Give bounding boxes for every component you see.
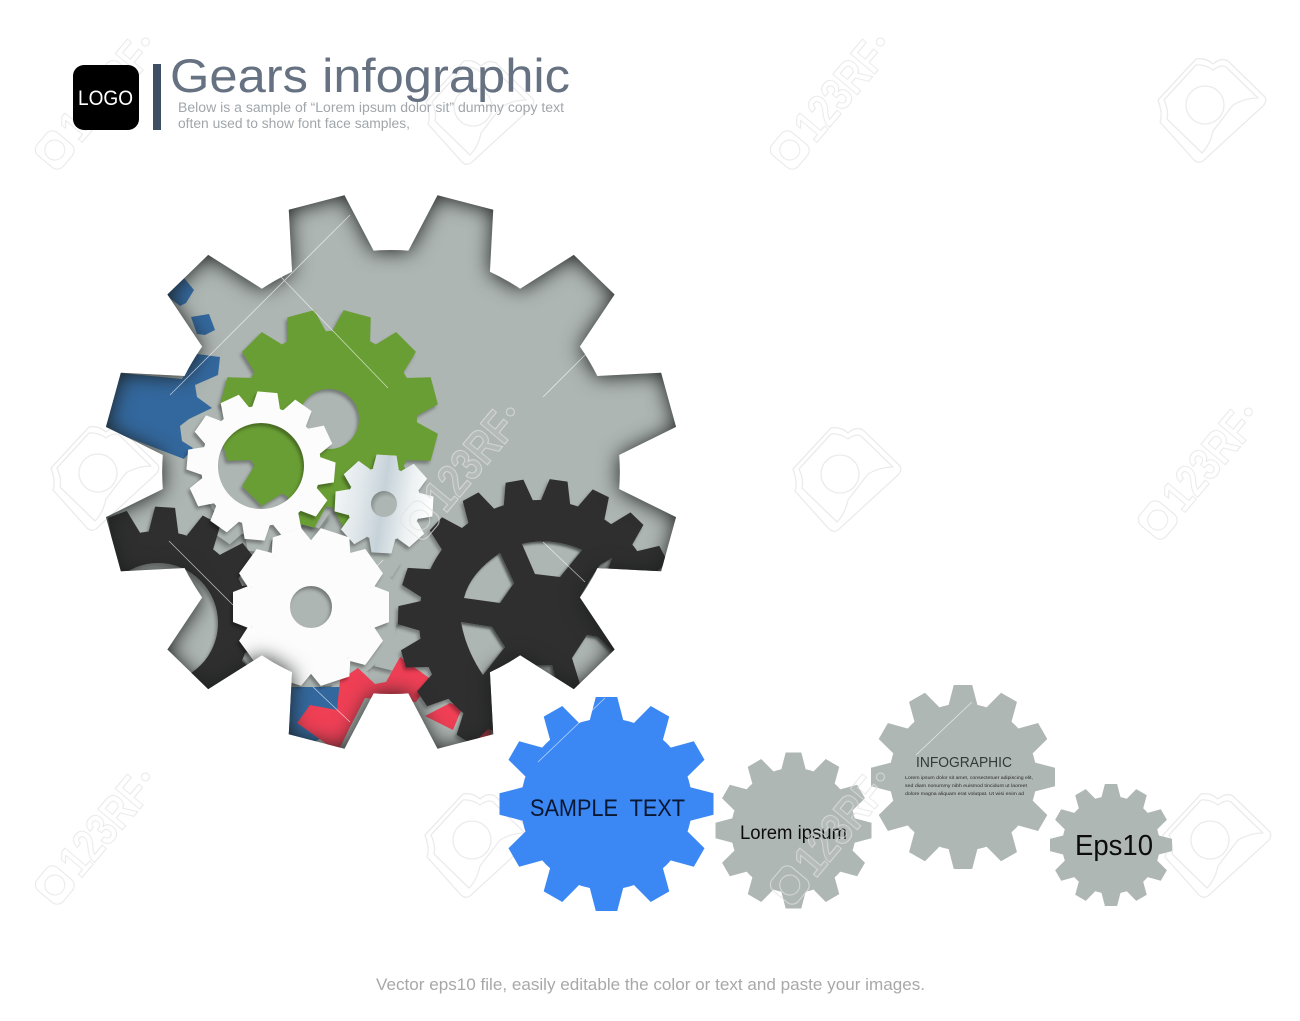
gray gear: lorem ipsum: Lorem ipsum: [740, 823, 847, 844]
gray gear: infographic: dolore magna aliquam erat volutpat. Ut wisi enim ad: [905, 791, 1024, 797]
title: Gears infographic: [170, 49, 570, 102]
inner edge shadow of the cut-out: [102, 192, 680, 752]
gray shadow gear below white ring: [200, 474, 332, 555]
gray gear: infographic: [871, 685, 1055, 869]
gray gear: infographic: Lorem ipsum dolor sit amet, consectetuer adipiscing elit,: [905, 775, 1033, 781]
white highlight sliver: [256, 655, 280, 666]
dark gear, left: [107, 506, 252, 690]
white lower gear: [233, 526, 389, 688]
blue gear: sample text: [500, 697, 714, 911]
silver small gear: [330, 450, 438, 558]
red gear fragments: [297, 657, 492, 752]
gray gear: Eps10: Eps10: [1075, 830, 1153, 862]
blue gear fragments: [98, 278, 345, 750]
title divider bar: [153, 64, 161, 130]
gray gear: infographic: INFOGRAPHIC: [916, 754, 1012, 771]
gray gear: infographic: sed diam nonummy nibh euismod tincidunt ut laoreet: [905, 783, 1028, 789]
dark gear, right: [394, 479, 665, 742]
green gear: [219, 309, 439, 529]
watermark camera outlines: [51, 59, 1271, 897]
logo badge: LOGO: [78, 87, 133, 110]
subtitle text: Below is a sample of “Lorem ipsum dolor sit” dummy copy text: [178, 100, 564, 115]
gray gear: Eps10: [1050, 784, 1172, 906]
subtitle text: often used to show font face samples,: [178, 116, 410, 131]
gray shadow gear behind white cog: [238, 520, 403, 699]
gray gear: lorem ipsum: [716, 752, 872, 908]
dark gear spoke openings: [461, 542, 616, 684]
footer caption: Vector eps10 file, easily editable the color or text and paste your images.: [376, 976, 925, 994]
blue gear: sample text: SAMPLE TEXT: [530, 795, 685, 822]
white ring gear: [186, 391, 336, 541]
subtitle text: [178, 100, 564, 131]
panel: large gear cut-out window: [106, 195, 676, 749]
logo badge: [73, 65, 139, 130]
window background: [90, 180, 690, 760]
